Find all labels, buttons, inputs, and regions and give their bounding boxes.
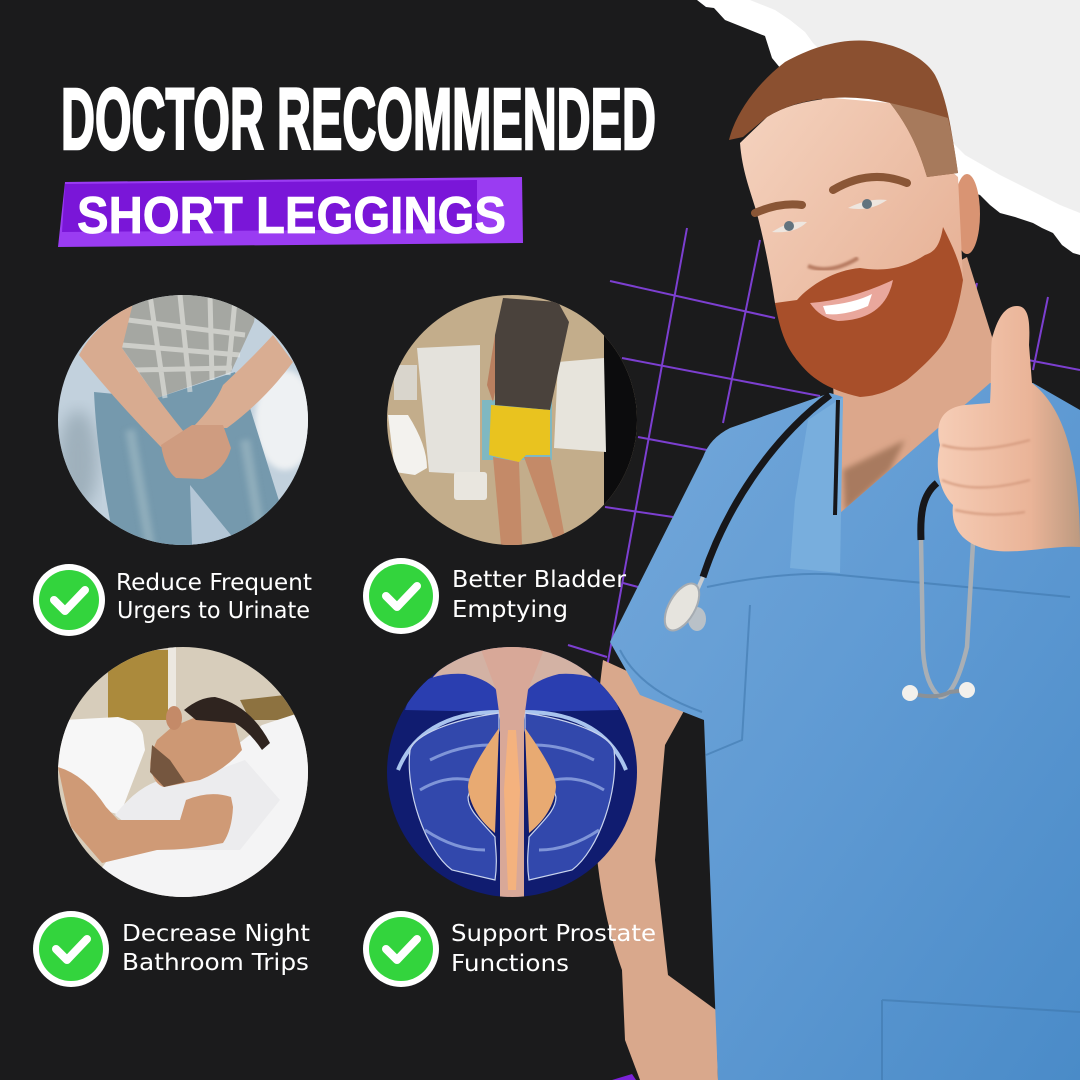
label: better bladder emptying: Emptying xyxy=(452,597,568,623)
label: better bladder emptying: Better Bladder xyxy=(452,567,627,593)
subtitle banner: SHORT LEGGINGS xyxy=(77,187,506,245)
scrubs xyxy=(610,383,1080,1080)
photo: man at urinal xyxy=(387,295,640,545)
label: decrease night trips xyxy=(122,921,310,976)
check icon: bladder xyxy=(363,558,439,634)
label: decrease night trips: Decrease Night xyxy=(122,921,310,947)
purple grid lines xyxy=(568,228,1080,667)
label: reduce frequent urges: Reduce Frequent xyxy=(116,570,312,596)
stethoscope xyxy=(703,395,830,577)
label: better bladder emptying xyxy=(452,567,627,623)
nose shadow xyxy=(808,258,858,269)
mouth xyxy=(810,280,893,321)
label: decrease night trips: Bathroom Trips xyxy=(122,950,309,976)
label: support prostate functions xyxy=(451,921,656,977)
eyes and brows xyxy=(755,177,907,213)
face xyxy=(740,98,963,397)
photo: man sleeping xyxy=(58,647,308,897)
check icon: frequent urges xyxy=(33,564,105,636)
neck xyxy=(830,257,1000,520)
beard xyxy=(775,227,963,397)
hair xyxy=(729,40,958,177)
torn white paper corner xyxy=(697,0,1080,255)
ear xyxy=(954,174,980,254)
photo: man holding groin xyxy=(58,295,315,560)
label: reduce frequent urges: Urgers to Urinate xyxy=(117,598,310,624)
label: support prostate functions: Functions xyxy=(451,951,569,977)
thumbs up hand xyxy=(938,306,1080,551)
check icon: night trips xyxy=(33,911,109,987)
label: support prostate functions: Support Prostate xyxy=(451,921,656,947)
left arm xyxy=(594,660,718,1080)
label: reduce frequent urges xyxy=(116,570,312,624)
purple corner accent xyxy=(612,1074,636,1080)
check icon: prostate xyxy=(363,911,439,987)
doctor figure xyxy=(594,40,1080,1080)
illustration: prostate anatomy xyxy=(387,647,637,897)
